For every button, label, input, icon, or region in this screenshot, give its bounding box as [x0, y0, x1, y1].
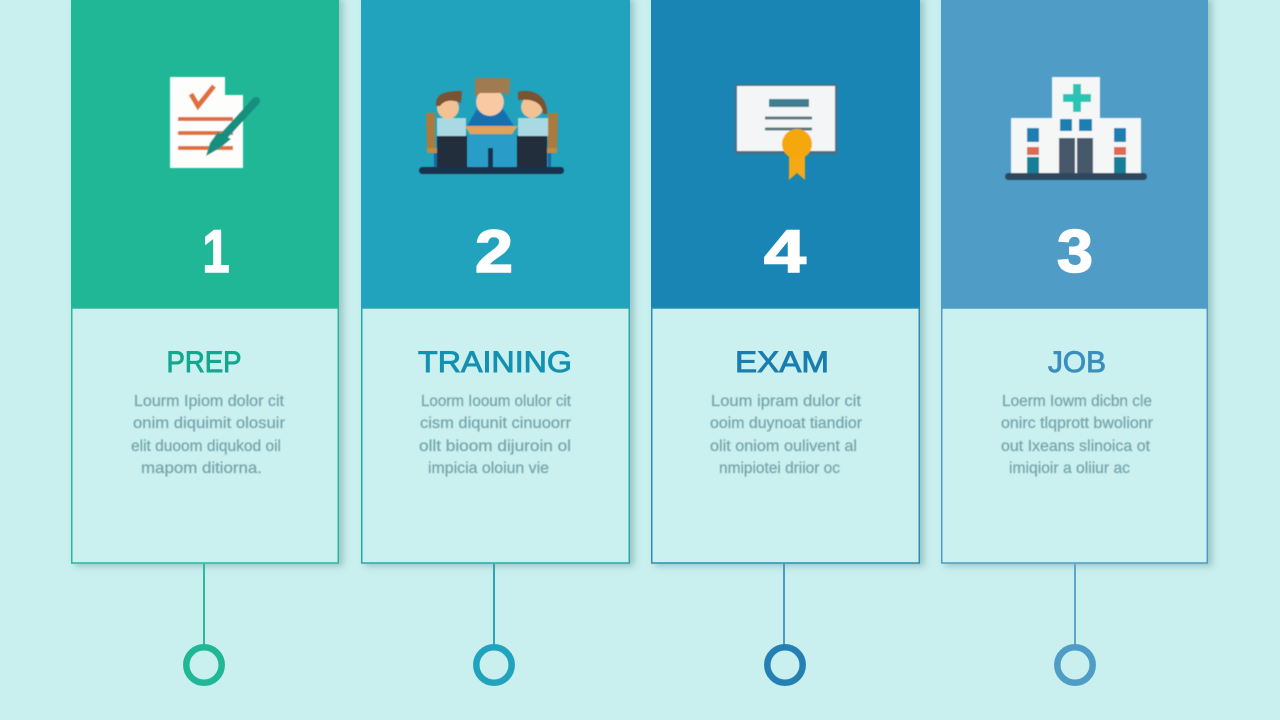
icon: three people at a table [419, 78, 564, 174]
connector and ring marker 1 [186, 564, 222, 683]
text block: exam description: ooim duynoat tiandior [710, 415, 863, 432]
connector and ring marker 3 [767, 564, 803, 683]
step number 3: 3 [1057, 218, 1093, 285]
text block: exam description: Loum ipram dulor cit [711, 393, 862, 410]
text block: job description: onirc tlqprott bwolionr [1001, 415, 1154, 432]
text block: prep description: Lourm Ipiom dolor cit [134, 393, 285, 410]
step number 4: 4 [764, 218, 807, 285]
step number 2: 2 [475, 218, 513, 285]
text block: job description: Loerm Iowm dicbn cle [1002, 393, 1152, 410]
text block: training description [419, 393, 572, 477]
text block: job description [1001, 393, 1154, 477]
text block: training description: cism diqunit cinuoorr [420, 415, 572, 432]
connector and ring marker 2 [476, 564, 512, 683]
panel: step 1 prep [71, 0, 339, 683]
panel: step 4 job [941, 0, 1208, 683]
text block: job description: out Ixeans slinoica ot [1001, 438, 1151, 455]
heading: PREP: PREP [166, 346, 242, 379]
text block: prep description: elit duoom diqukod oil [131, 438, 281, 455]
header block: step 3 [941, 0, 1208, 308]
icon: checklist document with pen [170, 77, 256, 168]
text block: prep description: mapom ditiorna. [141, 460, 262, 477]
text block: training description: ollt bioom dijuroin ol [419, 438, 571, 455]
text block: exam description: olit oniom oulivent al [710, 438, 857, 455]
header block: step 1 [71, 0, 339, 308]
step number 1: 1 [202, 218, 230, 285]
text block: prep description: onim diquimit olosuir [133, 415, 286, 432]
heading: TRAINING: TRAINING [418, 346, 572, 379]
icon: certificate with seal [735, 84, 837, 180]
text block: training description: impicia oloiun vie [428, 460, 549, 477]
panel: step 3 exam [651, 0, 920, 683]
heading: JOB: JOB [1048, 346, 1106, 379]
text block: exam description [710, 393, 863, 477]
connector and ring marker 4 [1057, 564, 1093, 683]
text block: prep description [131, 393, 286, 477]
header block: step 2 [361, 0, 630, 308]
icon: hospital building [1005, 77, 1147, 180]
panel: step 2 training [361, 0, 630, 683]
text block: job description: imiqioir a oliiur ac [1009, 460, 1130, 477]
header block: step 4 [651, 0, 920, 308]
heading: EXAM: EXAM [735, 346, 829, 379]
text block: training description: Loorm Iooum olulor cit [421, 393, 572, 410]
text block: exam description: nmipiotei driior oc [719, 460, 840, 477]
